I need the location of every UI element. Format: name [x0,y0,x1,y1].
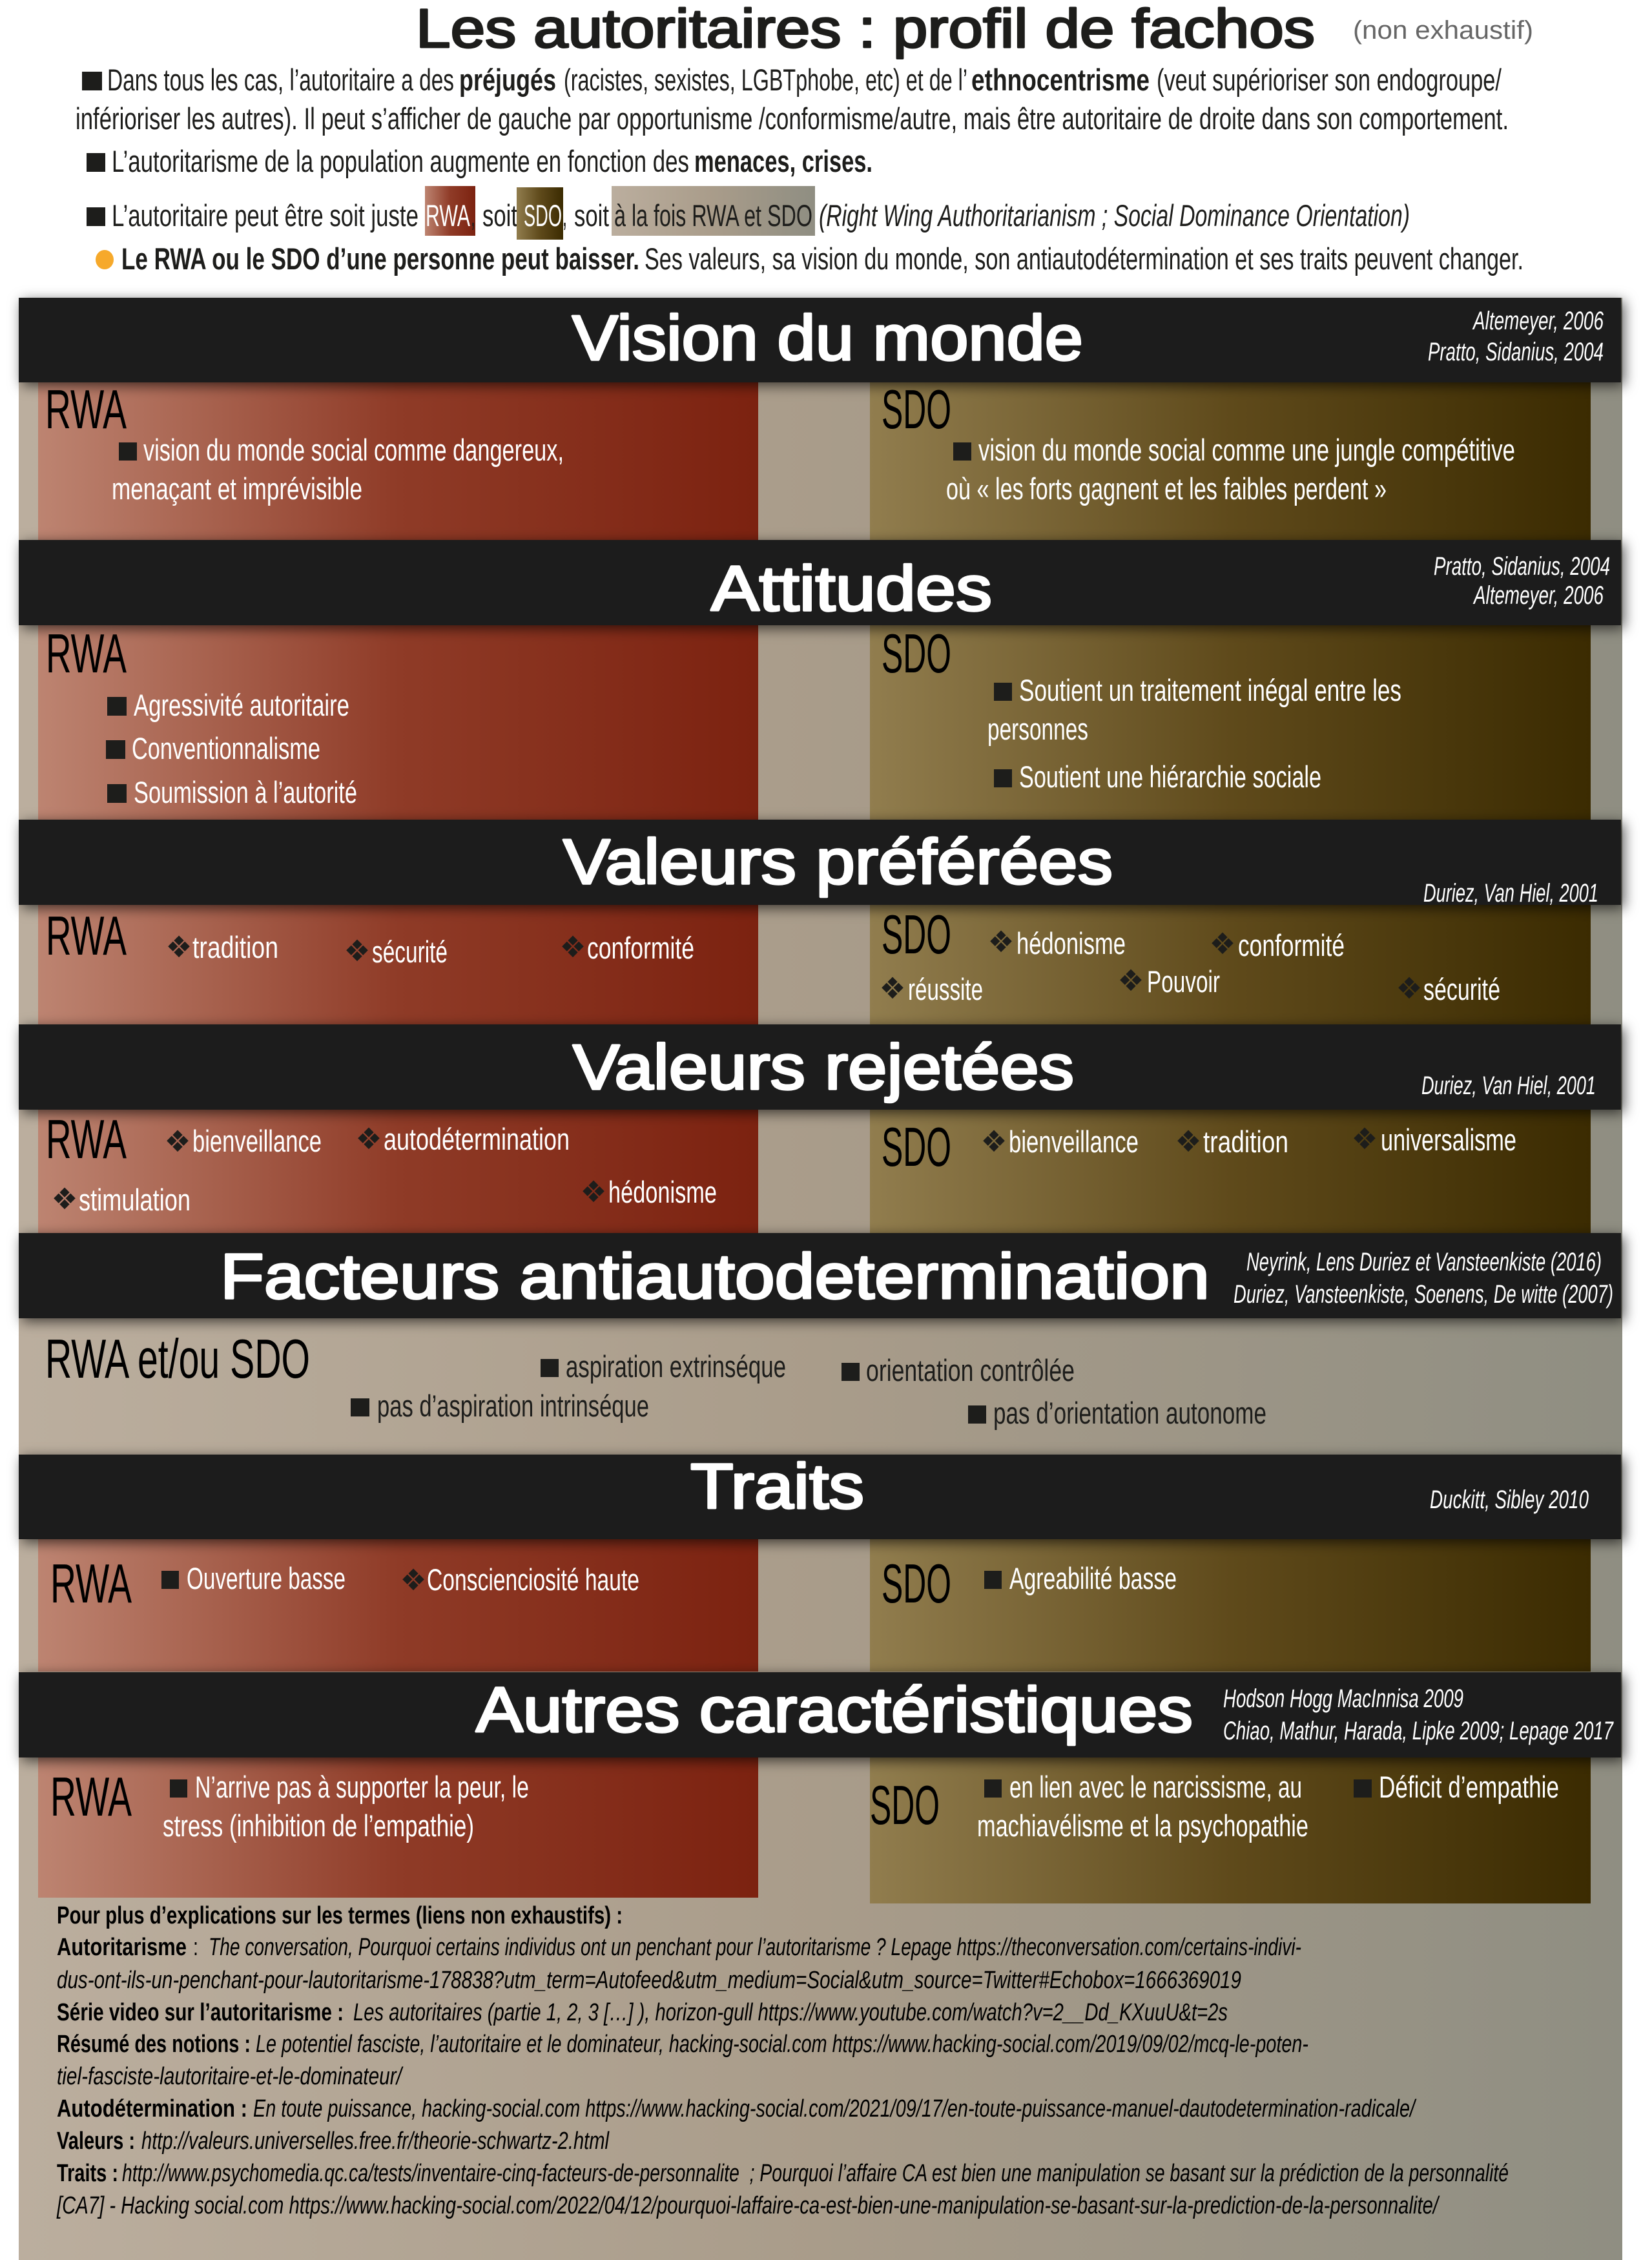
text block: further reading links: : [193,1934,198,1961]
panel: SDO rejected values: ❖ [980,1124,1007,1159]
panel: RWA preferred values: conformité [587,931,694,965]
text block: further reading links: Résumé des notions : [57,2031,251,2058]
intro paragraph 3 with colour keys: , [471,198,475,233]
panel: SDO preferred values: conformité [1238,928,1345,962]
panel: SDO attitudes: Soutient une hiérarchie sociale [1019,760,1321,794]
intro paragraph 3 with colour keys: , [563,198,567,233]
panel: SDO attitudes: SDO [882,623,951,685]
panel: SDO traits [870,1539,1591,1672]
panel: SDO preferred values: ❖ [987,924,1015,959]
panel: RWA rejected values: hédonisme [608,1175,717,1209]
heading bar: Autres caractéristiques [19,1672,1621,1757]
intro paragraph 3 with colour keys [87,186,1410,240]
panel: RWA preferred values: RWA [46,906,127,967]
panel: SDO preferred values: SDO [882,904,951,966]
panel: RWA attitudes [38,623,758,820]
panel: SDO other characteristics: machiavélisme et la psychopathie [977,1809,1308,1843]
text block: further reading links: Les autoritaires (partie 1, 2, 3 […] ), horizon-gull https://www.youtube.com/watch?v=2__Dd_KXuuU&t=2s [353,1999,1228,2026]
section: Autres caractéristiques [19,1672,1621,1903]
text block: further reading links: Autodétermination : [57,2095,247,2122]
panel: SDO preferred values: ❖ [1209,926,1236,961]
text block: further reading links: tiel-fasciste-lautoritaire-et-le-dominateur/ [57,2063,404,2090]
text block: further reading links: Le potentiel fasciste, l’autoritaire et le dominateur, hacking-social.com https://www.hacking-social.com/2019/09/02/mcq-le-poten- [256,2031,1308,2058]
panel: SDO other characteristics: Déficit d’empathie [1379,1770,1559,1804]
subtitle note: (non exhaustif) [1353,16,1533,45]
heading bar: Traits: Traits [690,1451,864,1522]
intro paragraph 1: préjugés [459,63,556,97]
panel: SDO preferred values: réussite [908,972,983,1006]
panel: SDO attitudes: Soutient un traitement inégal entre les [1019,673,1401,707]
section: Valeurs rejetées [19,1024,1621,1233]
intro paragraph 3 with colour keys: L’autoritaire peut être soit juste [112,198,418,233]
heading bar: Valeurs rejetées [19,1024,1621,1110]
panel: RWA rejected values: bienveillance [192,1124,322,1158]
section: Vision du monde [19,298,1621,540]
intro paragraph 3 with colour keys: à la fois RWA et SDO [614,198,812,233]
heading bar: Valeurs préférées: Valeurs préférées [563,826,1113,897]
panel: RWA attitudes: RWA [46,623,127,685]
panel: SDO vision [870,379,1591,540]
intro paragraph 2: L’autoritarisme de la population augmente en fonction des [112,144,689,178]
intro text block [76,63,1523,276]
panel: RWA rejected values [38,1109,758,1233]
panel: RWA rejected values: ❖ [51,1181,78,1216]
panel: RWA attitudes: Soumission à l’autorité [134,775,357,809]
panel: SDO rejected values: SDO [882,1117,951,1178]
intro paragraph 3 with colour keys: soit [574,198,609,233]
panel: RWA et/ou SDO factors: aspiration extrinséque [566,1349,786,1384]
text block: further reading links: Traits : [57,2160,118,2187]
panel: RWA traits: RWA [50,1553,132,1615]
section: Facteurs antiautodetermination [19,1233,1621,1430]
panel: SDO preferred values: Pouvoir [1147,964,1220,999]
panel: RWA et/ou SDO factors: pas d’orientation autonome [993,1396,1266,1430]
text block: further reading links: Valeurs : [57,2128,135,2155]
panel: SDO rejected values: bienveillance [1009,1125,1139,1159]
panel: RWA traits [38,1539,758,1672]
intro paragraph 3 with colour keys: soit [482,198,517,233]
panel: SDO rejected values: ❖ [1351,1121,1378,1156]
panel: RWA preferred values: ❖ [344,933,371,968]
panel: RWA preferred values: tradition [192,930,278,964]
panel: RWA rejected values: ❖ [164,1124,191,1159]
intro paragraph 3 with colour keys: (Right Wing Authoritarianism ; Social Dominance Orientation) [819,198,1410,233]
panel: SDO vision: SDO [882,379,951,441]
intro paragraph 2: menaces, crises. [694,144,872,178]
panel: SDO other characteristics: SDO [870,1775,940,1836]
text block: further reading links: The conversation, Pourquoi certains individus ont un penchant pour l’autoritarisme ? Lepage https://theconversation.com/certains-indivi- [209,1934,1301,1961]
panel: RWA rejected values: ❖ [580,1174,607,1209]
section: Traits [19,1451,1621,1672]
panel: RWA preferred values: ❖ [559,929,586,964]
panel: SDO preferred values [870,904,1591,1024]
panel: RWA other characteristics: RWA [50,1767,132,1828]
panel: SDO attitudes [870,623,1591,820]
heading bar: Vision du monde [19,298,1621,382]
panel: SDO rejected values: tradition [1203,1125,1288,1159]
panel: SDO other characteristics: en lien avec le narcissisme, au [1009,1770,1302,1804]
panel: SDO other characteristics [870,1757,1591,1903]
panel: RWA vision: menaçant et imprévisible [112,472,362,506]
panel: RWA preferred values: sécurité [372,935,448,969]
panel: SDO preferred values: ❖ [1117,963,1144,998]
panel: SDO preferred values: ❖ [879,971,906,1006]
panel: RWA et/ou SDO factors: RWA et/ou SDO [45,1329,310,1390]
heading bar: Attitudes: Attitudes [711,553,992,624]
text block: further reading links: Pour plus d’explications sur les termes (liens non exhaustifs) : [57,1902,623,1929]
intro paragraph 1: Dans tous les cas, l’autoritaire a des [107,63,454,97]
intro paragraph 3 with colour keys: SDO [524,198,562,233]
section: Valeurs préférées [19,820,1621,1024]
panel: RWA et/ou SDO factors: orientation contrôlée [866,1353,1075,1387]
text block: further reading links: dus-ont-ils-un-penchant-pour-lautoritarisme-178838?utm_term=Autofeed&utm_medium=Social&utm_source=Twitter#Echobox=1666369019 [57,1967,1241,1994]
panel: RWA traits: Ouverture basse [187,1561,346,1595]
panel: SDO vision: où « les forts gagnent et les faibles perdent » [946,472,1387,506]
panel: RWA et/ou SDO factors: pas d’aspiration intrinséque [377,1389,649,1423]
panel: RWA traits: ❖ [400,1562,427,1597]
heading bar: Traits: Duckitt, Sibley 2010 [1430,1486,1589,1514]
section: Attitudes [19,540,1621,820]
panel: SDO preferred values: sécurité [1423,972,1500,1006]
heading bar: Traits [19,1451,1621,1539]
text block: further reading links: Autoritarisme [57,1934,187,1961]
panel: RWA rejected values: RWA [46,1109,127,1170]
panel: RWA other characteristics [38,1757,758,1898]
intro paragraph 1 [76,63,1509,136]
panel: SDO rejected values: universalisme [1381,1123,1516,1157]
panel: SDO preferred values: hédonisme [1017,926,1126,960]
heading bar: Autres caractéristiques: Hodson Hogg MacInnisa 2009 [1223,1685,1463,1713]
panel: RWA attitudes: Conventionnalisme [132,731,320,765]
panel: RWA rejected values: ❖ [355,1121,382,1156]
panel: RWA other characteristics: N’arrive pas à supporter la peur, le [195,1770,529,1804]
intro paragraph 3 with colour keys: RWA [426,198,470,233]
panel: RWA vision: vision du monde social comme dangereux, [143,433,564,467]
panel: RWA other characteristics: stress (inhibition de l’empathie) [163,1809,474,1843]
panel: SDO attitudes: personnes [987,712,1088,746]
heading bar: Autres caractéristiques: Autres caractéristiques [476,1674,1193,1745]
panel: RWA et/ou SDO factors [45,1329,1266,1430]
panel: SDO traits: SDO [882,1553,951,1615]
text block: further reading links [56,1902,1509,2219]
intro paragraph 4 with orange dot [96,242,1523,276]
heading bar: Attitudes [19,540,1621,625]
intro paragraph 1: ethnocentrisme [971,63,1150,97]
panel: RWA rejected values: autodétermination [384,1122,570,1156]
panel: RWA preferred values [38,905,758,1024]
panel: RWA attitudes: Agressivité autoritaire [134,688,349,722]
panel: SDO rejected values [870,1110,1591,1233]
panel: SDO rejected values: ❖ [1175,1124,1202,1159]
panel: RWA vision: RWA [45,379,127,441]
heading bar: Vision du monde: Vision du monde [572,302,1083,373]
panel: SDO traits: Agreabilité basse [1009,1561,1177,1595]
heading bar: Valeurs rejetées: Valeurs rejetées [573,1032,1074,1103]
heading bar: Valeurs préférées [19,820,1621,907]
panel: RWA preferred values: ❖ [165,929,192,964]
panel: SDO preferred values: ❖ [1396,971,1423,1006]
intro paragraph 1: (veut supérioriser son endogroupe/ [1157,63,1502,97]
intro paragraph 4 with orange dot: Le RWA ou le SDO d’une personne peut baisser. [121,242,639,276]
heading bar: Facteurs antiautodetermination [19,1233,1621,1318]
text block: further reading links: Série video sur l’autoritarisme : [57,1999,344,2026]
panel: RWA traits: Conscienciosité haute [427,1562,639,1597]
panel: RWA rejected values: stimulation [79,1183,191,1217]
intro paragraph 1: (racistes, sexistes, LGBTphobe, etc) et de l’ [564,63,967,97]
text block: further reading links: http://valeurs.universelles.free.fr/theorie-schwartz-2.html [141,2128,610,2155]
panel: RWA vision [38,379,758,540]
heading bar: Facteurs antiautodetermination: Facteurs antiautodetermination [220,1241,1210,1312]
